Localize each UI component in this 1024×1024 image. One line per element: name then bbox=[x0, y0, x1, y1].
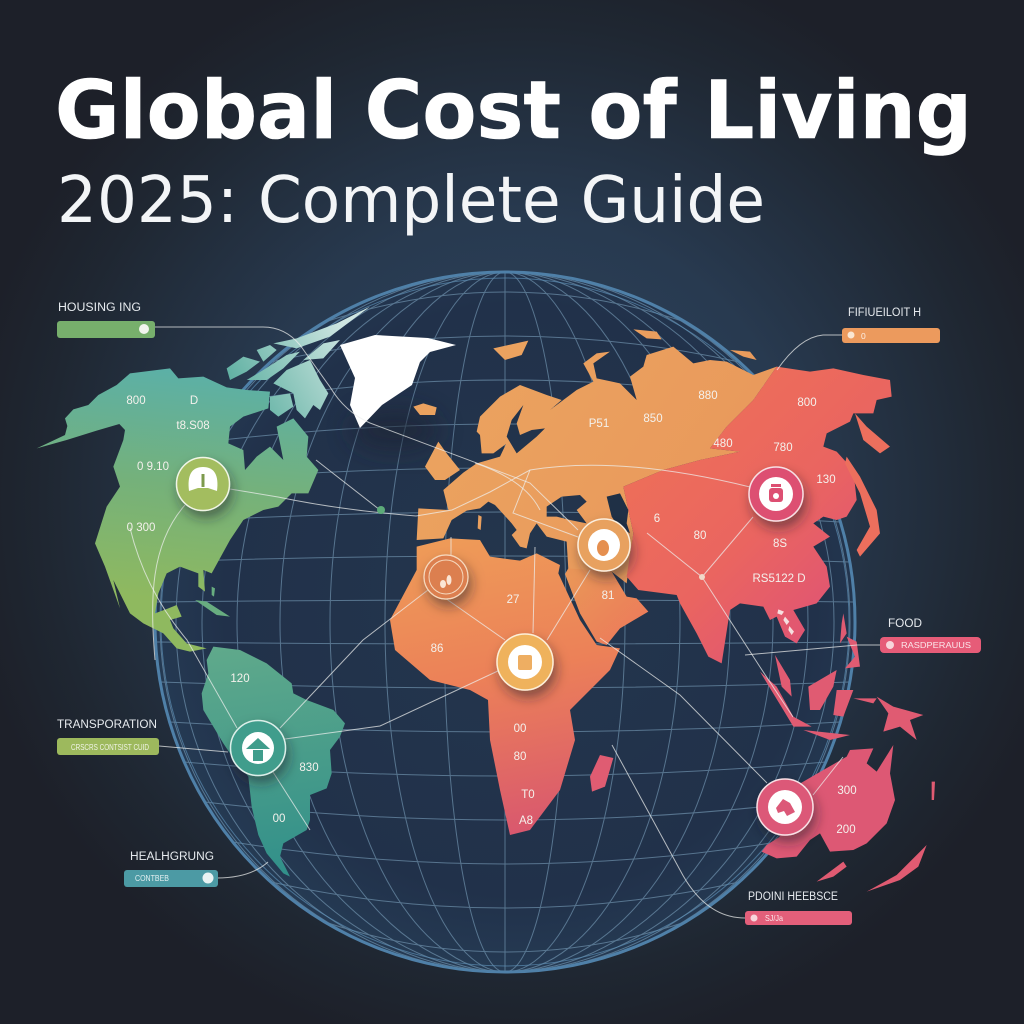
label: top right bbox=[842, 307, 940, 343]
title: Global Cost of Living bbox=[55, 64, 972, 157]
label: transportation bbox=[57, 719, 159, 755]
eurasia bbox=[413, 329, 892, 663]
marker: middle east bbox=[578, 519, 630, 571]
label: housing bbox=[57, 302, 155, 338]
map values: 80 bbox=[514, 751, 526, 763]
subtitle: 2025: Complete Guide bbox=[57, 164, 765, 238]
map values: t8.S08 bbox=[176, 420, 210, 432]
map values: 27 bbox=[507, 594, 519, 606]
map values: 120 bbox=[230, 673, 250, 685]
map values: 480 bbox=[713, 438, 733, 450]
marker: australia bbox=[757, 779, 813, 835]
map values: P51 bbox=[589, 418, 609, 430]
marker: north america housing bbox=[176, 458, 230, 510]
map values: 81 bbox=[602, 590, 614, 602]
map values: 86 bbox=[431, 643, 443, 655]
marker: central africa bbox=[497, 634, 553, 690]
label: health: HEALHGRUNG bbox=[130, 851, 214, 863]
map values: 300 bbox=[837, 785, 857, 797]
map values: 00 bbox=[514, 723, 526, 735]
label: health: CONTBEB bbox=[135, 873, 169, 883]
marker: west africa bbox=[424, 555, 468, 599]
southeast asia and oceania bbox=[760, 613, 935, 892]
label: top right: 0 bbox=[861, 331, 866, 341]
map values: 8S bbox=[773, 538, 787, 550]
label: bottom right: SJ/Ja bbox=[765, 913, 783, 923]
map values: 0 9.10 bbox=[137, 461, 169, 473]
map values: 780 bbox=[773, 442, 793, 454]
globe bbox=[155, 272, 855, 972]
map values: 130 bbox=[816, 474, 836, 486]
marker: asia food bbox=[749, 467, 803, 521]
south america bbox=[202, 647, 345, 877]
map values: 00 bbox=[273, 813, 285, 825]
greenland shadow bbox=[350, 408, 440, 452]
label: bottom right bbox=[745, 891, 852, 925]
label: top right: FIFIUEILOIT H bbox=[848, 307, 921, 319]
africa and arabia bbox=[390, 538, 648, 835]
marker: south america bbox=[230, 720, 286, 776]
map values: 800 bbox=[797, 397, 817, 409]
map values: T0 bbox=[521, 789, 535, 801]
label: transportation: TRANSPORATION bbox=[57, 719, 157, 731]
greenland bbox=[340, 335, 456, 428]
map values: 0 300 bbox=[127, 522, 155, 534]
label: bottom right: PDOINI HEEBSCE bbox=[748, 891, 838, 903]
map values: 200 bbox=[836, 824, 856, 836]
map values: D bbox=[190, 395, 198, 407]
map values: RS5122 D bbox=[752, 573, 806, 585]
map values: 830 bbox=[299, 762, 319, 774]
label: housing: HOUSING ING bbox=[58, 302, 141, 314]
label: food bbox=[880, 618, 981, 653]
map values: 880 bbox=[698, 390, 718, 402]
label: food: RASDPERAUUS bbox=[901, 640, 971, 650]
map values bbox=[126, 390, 857, 836]
connector lines bbox=[130, 327, 880, 918]
map values: 800 bbox=[126, 395, 146, 407]
label: transportation: CRSCRS CONTSIST CUID bbox=[71, 742, 149, 752]
map values: A8 bbox=[519, 815, 533, 827]
map values: 80 bbox=[694, 530, 706, 542]
map values: 6 bbox=[654, 513, 660, 525]
map values: 850 bbox=[643, 413, 663, 425]
north america bbox=[37, 307, 370, 652]
label: health bbox=[124, 851, 218, 887]
label: food: FOOD bbox=[888, 618, 922, 630]
